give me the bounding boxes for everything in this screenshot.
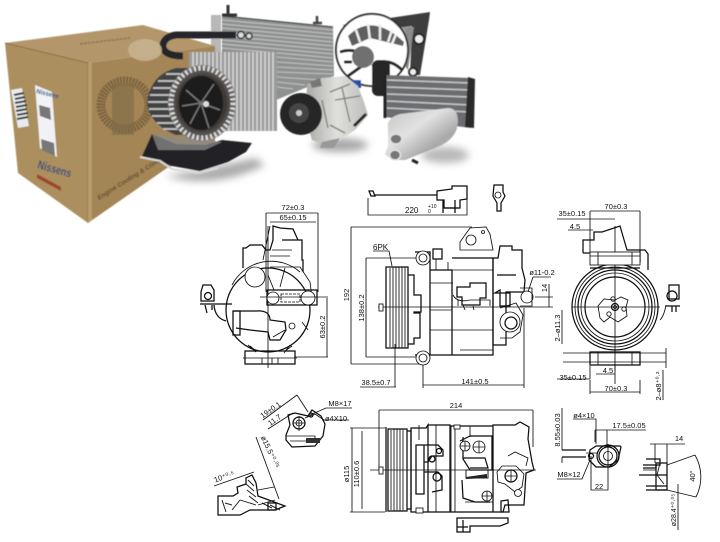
dimension 72±0.3: 72±0.3 [282, 203, 304, 212]
rear housing [493, 246, 525, 345]
dimension 17.5: 17.5±0.05 [612, 421, 646, 430]
text: tagline on box: Engine Cooling & Climate [96, 153, 168, 202]
dimension 138±0.2 [357, 258, 418, 357]
dimension bottom 35±0.15 [557, 365, 615, 384]
product: AC compressor photo [280, 76, 368, 152]
callout ø4×10 [573, 411, 596, 444]
dimension 110±0.6 [352, 431, 362, 509]
dimension 2-ø8: 2–ø8⁺⁰·² [654, 371, 663, 401]
dimension 8.55: 8.55±0.03 [553, 413, 562, 447]
drawing: bracket detail [213, 395, 352, 515]
drawing: compressor top view [342, 401, 536, 532]
dimension bottom 35±0.15: 35±0.15 [559, 373, 587, 382]
dimension 220: 0 [428, 209, 431, 215]
callout 6PK [373, 243, 392, 266]
technical drawings [200, 185, 701, 532]
callout 6PK: 6PK [373, 243, 389, 252]
dimension 214 [379, 401, 533, 470]
dimension 214: 214 [450, 401, 462, 410]
dimension 72±0.3 [266, 203, 318, 292]
dimension bottom 4.5 [596, 366, 615, 375]
dimension 19±0.1: 19±0.1 [259, 400, 283, 420]
barcode sticker [11, 88, 29, 128]
center line [378, 306, 530, 308]
product: receiver drier [385, 108, 469, 163]
section view [639, 444, 701, 530]
dimension top 70±0.3: 70±0.3 [605, 202, 627, 211]
dimension ø11: ø11-0.2 [529, 268, 555, 277]
product: evaporator [189, 52, 277, 131]
drawing: compressor side view [360, 227, 555, 388]
logo: Q ring [101, 81, 149, 129]
dimension top 4.5: 4.5 [570, 222, 580, 231]
dimension 192 [342, 227, 472, 364]
dimension bottom 70±0.3: 70±0.3 [605, 384, 627, 393]
center line [370, 469, 536, 471]
dimension 192: 192 [342, 289, 351, 301]
dimension 10: 10⁺⁰·⁵ [213, 469, 236, 484]
drawing: compressor rear view [200, 203, 472, 368]
dimension top 70±0.3 [590, 202, 640, 252]
dimension bottom 70±0.3 [590, 380, 640, 394]
dimension 138±0.2: 138±0.2 [357, 294, 366, 322]
dimension 110±0.6: 110±0.6 [352, 461, 361, 487]
sensor plug [660, 285, 680, 320]
product: shipping box [5, 25, 215, 223]
dimension ø15.5: ø15.5⁺⁰·⁰⁵ [259, 434, 282, 470]
dimension 11.7: 11.7 [266, 412, 283, 428]
dimension bottom 4.5: 4.5 [603, 366, 613, 375]
dimension ø115: ø115 [342, 466, 351, 482]
dimension 14: 14 [675, 434, 683, 443]
product: radiator fan [336, 12, 430, 96]
dimension 220: 220 [405, 206, 419, 215]
product: shipping box: Nissens [35, 88, 60, 101]
dimension 63±0.2 [295, 298, 328, 357]
dimension top 35±0.15: 35±0.15 [558, 209, 586, 218]
dimension top 4.5 [568, 222, 593, 231]
compressor housing outline [226, 226, 328, 368]
dimension 141±0.5: 141±0.5 [461, 377, 489, 386]
dimension 65±0.15 [270, 213, 316, 222]
drawing: compressor front view [553, 202, 680, 401]
dimension 8.55 [553, 408, 562, 463]
dimension top 35±0.15 [557, 209, 615, 219]
bolt bottom [416, 351, 430, 365]
dimension 17.5 [595, 421, 646, 446]
dimension 22: 22 [595, 482, 603, 491]
dimension 2-ø11.3: 2–ø11.3 [553, 315, 562, 341]
dimension 65±0.15: 65±0.15 [279, 213, 307, 222]
drawing: temperature sensor [368, 185, 505, 215]
sensor plug [200, 285, 232, 321]
drawing: mounting detail [553, 408, 701, 530]
mounting foot [457, 518, 508, 532]
logo: Nissens on box: Nissens [36, 159, 73, 181]
callout M8×12: M8×12 [557, 470, 581, 479]
callout M8×17: M8×17 [328, 399, 352, 408]
dimension 14: 14 [540, 284, 549, 292]
clutch drum and pulley [386, 427, 411, 512]
compressor body [411, 422, 534, 513]
wiring connector [457, 283, 486, 305]
callout ø4×10: ø4×10 [573, 411, 595, 420]
product: heater radiator [385, 75, 475, 128]
dimension 38.5±0.7 [360, 344, 396, 387]
mounting ear [460, 227, 493, 250]
bolt top [416, 251, 430, 265]
dimension 40°: 40° [688, 470, 697, 482]
dimension 141±0.5 [423, 308, 524, 388]
text: box lid print [80, 38, 130, 44]
dimension 38.5±0.7: 38.5±0.7 [361, 378, 391, 387]
section drawing [218, 475, 285, 515]
label sticker [35, 85, 57, 157]
dimension 14 [530, 284, 553, 307]
callout M4X10: ø4X10 [325, 414, 347, 423]
product: pipe [128, 32, 252, 61]
dimension ø115 [342, 428, 385, 512]
product: blower fan [140, 65, 265, 181]
dimension ø11 [528, 268, 555, 292]
dimension 63±0.2: 63±0.2 [318, 316, 327, 338]
product: condenser [211, 5, 334, 100]
dimension 220: +10 [428, 204, 437, 210]
dimension 220 [368, 186, 467, 215]
callout M8×12 [557, 460, 590, 479]
dimension ø28.4: ø28.4⁺⁰·⁰⁵ [670, 494, 678, 526]
photo: product group [5, 5, 475, 223]
